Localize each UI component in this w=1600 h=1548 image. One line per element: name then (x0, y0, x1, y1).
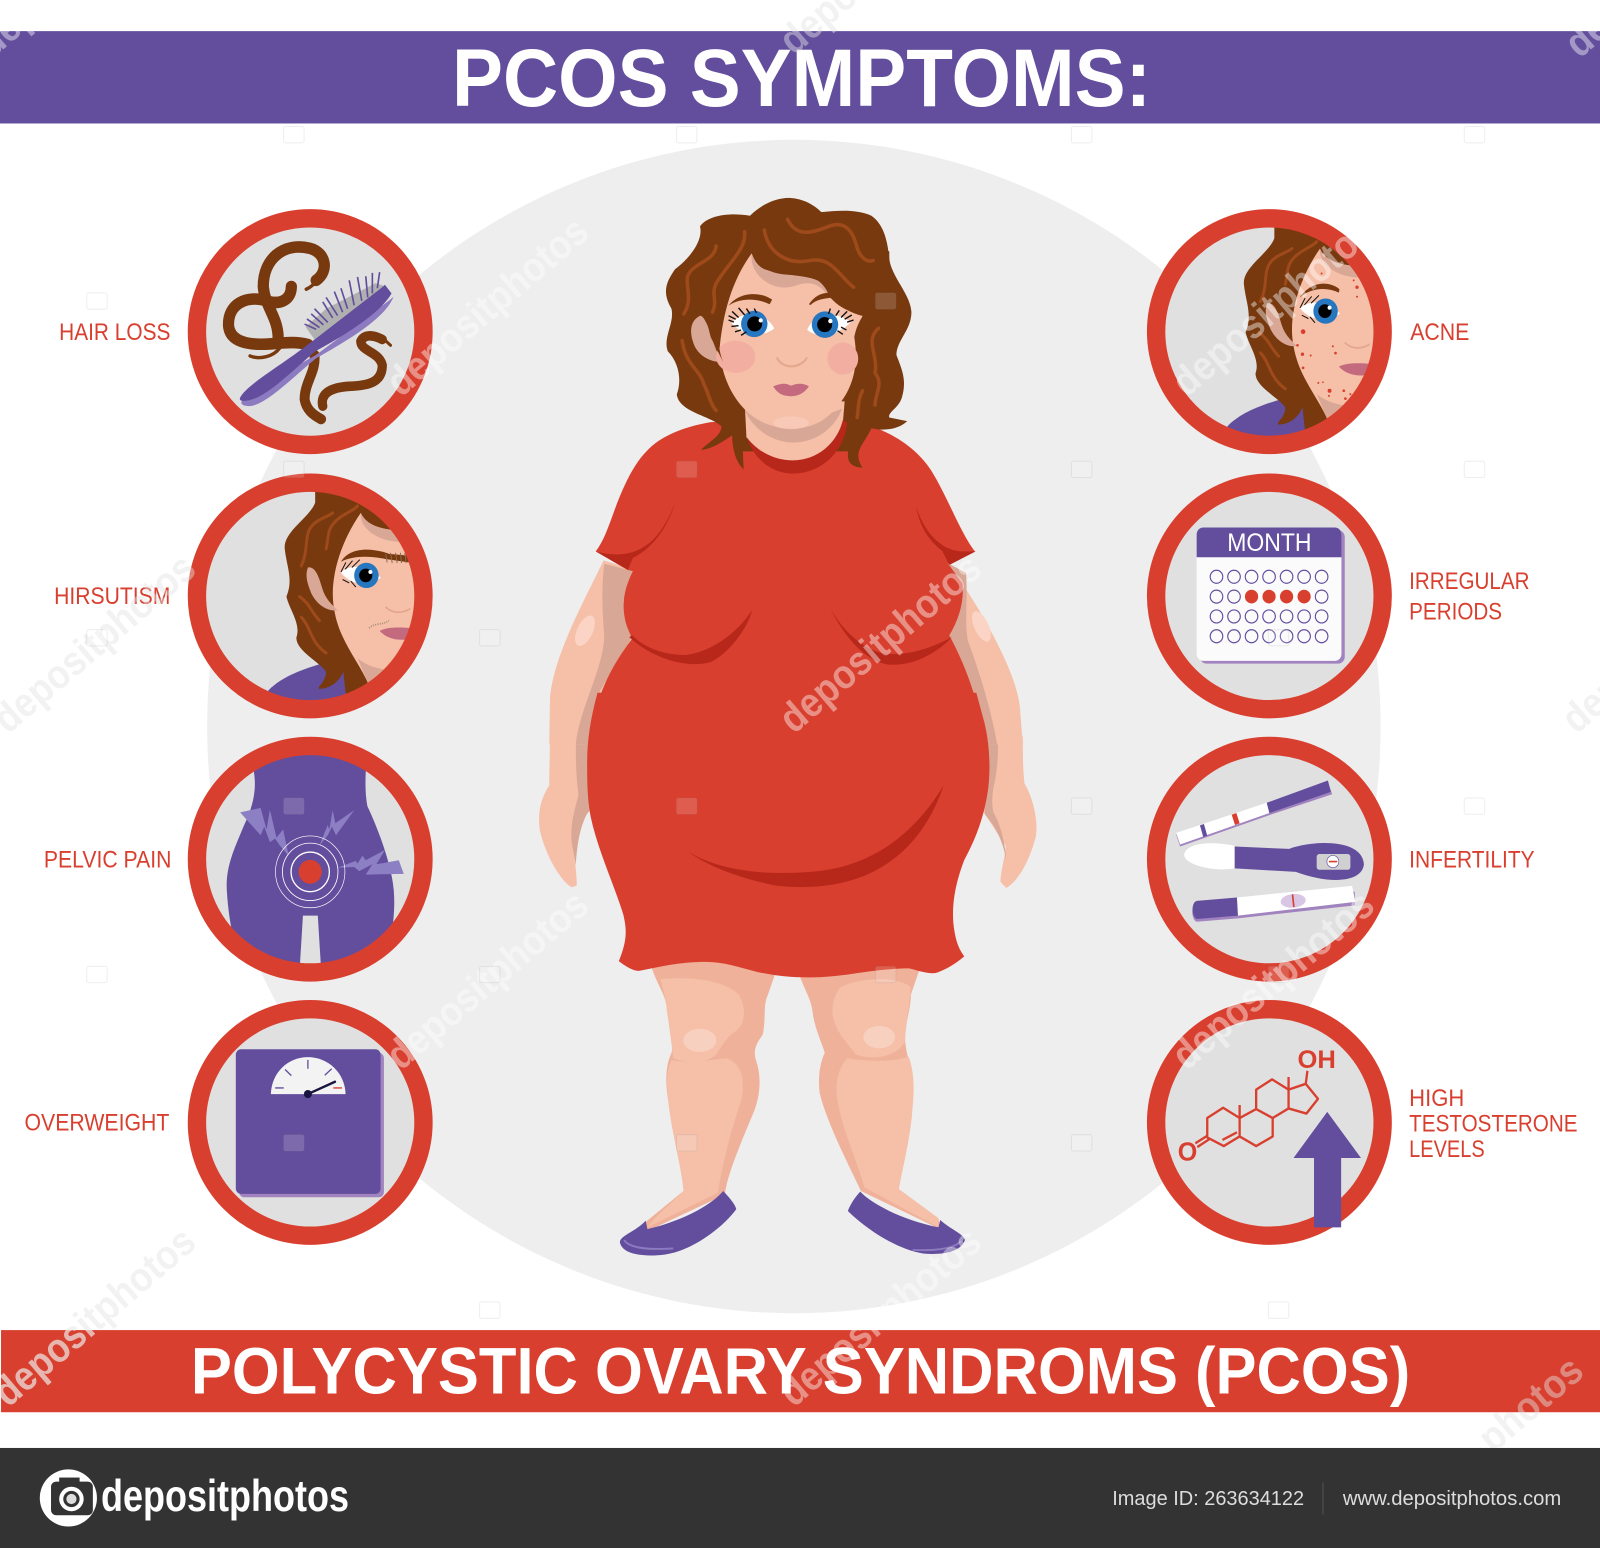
panel: irregular periods icon (1163, 490, 1376, 702)
bottom banner (1, 1330, 1600, 1412)
shoe: right (848, 1192, 965, 1254)
belly fold (689, 785, 944, 887)
eye: left (729, 308, 774, 337)
panel: hair loss icon (204, 226, 416, 438)
hair strands (229, 247, 391, 419)
navel (793, 731, 808, 738)
dial (271, 1057, 346, 1094)
ring: hirsutism (197, 483, 423, 709)
labels: left column: OVERWEIGHT (24, 1110, 169, 1137)
labels: right column: PERIODS (1409, 598, 1502, 625)
nose (777, 358, 807, 366)
ring: pelvic pain (197, 746, 423, 972)
thick brow and stubble (341, 550, 409, 628)
cheeks (716, 341, 858, 375)
panel: pelvic pain icon (206, 755, 414, 963)
watermarks: depositphotos (1163, 207, 1383, 405)
arrow: increase (1294, 1112, 1361, 1227)
ring: irregular periods (1156, 483, 1383, 709)
large grey circle (207, 140, 1381, 1313)
dress top (588, 416, 986, 751)
bust creases (629, 610, 752, 664)
watermarks: depositphotos (377, 881, 597, 1078)
ear (691, 316, 723, 362)
collar (747, 420, 847, 474)
pain centre (299, 860, 322, 884)
scale (239, 1053, 384, 1197)
pregnancy test: stick (1192, 886, 1355, 922)
oxygen labels: OH (1297, 1047, 1336, 1074)
labels: right column (1409, 319, 1578, 1163)
labels: right column: INFERTILITY (1409, 846, 1535, 873)
dress: skirt (587, 693, 989, 977)
panel: overweight icon (204, 1016, 416, 1229)
website: www.depositphotos.com (1342, 1488, 1561, 1510)
panel: acne icon (1166, 228, 1374, 436)
header band (0, 31, 1600, 124)
legs and feet (620, 951, 965, 1255)
icon: camera logo (40, 1469, 97, 1527)
labels: right column: HIGH (1409, 1085, 1464, 1112)
ring: infertility (1156, 746, 1383, 972)
watermarks: photos (1469, 1346, 1592, 1461)
banner text: POLYCYSTIC OVARY SYNDROMS (PCOS) (191, 1334, 1410, 1408)
period days (1245, 590, 1311, 603)
torso silhouette (226, 755, 394, 963)
ring: acne (1156, 218, 1383, 445)
neck (745, 401, 845, 464)
pain bolts (240, 808, 404, 875)
title: PCOS SYMPTOMS: (452, 33, 1151, 124)
ring: high testosterone (1156, 1009, 1383, 1236)
pregnancy test: strip (1176, 781, 1332, 847)
lower arms (539, 736, 1036, 888)
upper arms (549, 560, 1023, 744)
calendar (1200, 530, 1345, 664)
chin highlight (773, 416, 809, 429)
ring: overweight (197, 1009, 423, 1236)
hair: back (666, 198, 911, 469)
labels: left column: HIRSUTISM (54, 583, 170, 610)
oxygen labels: O (1178, 1138, 1197, 1166)
logo wordmark: depositphotos (101, 1470, 349, 1521)
footer bar (0, 1448, 1600, 1548)
watermarks: depositphotos (770, 1218, 990, 1415)
eyebrows (729, 293, 830, 306)
testosterone molecule (1195, 1071, 1318, 1147)
face (720, 253, 862, 429)
hair: bangs and waves (682, 216, 889, 418)
watermarks: depositphotos (770, 544, 990, 742)
labels: right column: LEVELS (1409, 1136, 1485, 1163)
camera watermark marks (87, 127, 1485, 1318)
labels: right column: ACNE (1410, 319, 1469, 346)
panel: high testosterone icon (1163, 1016, 1376, 1229)
eye: right (807, 309, 854, 338)
labels: right column: IRREGULAR (1409, 568, 1530, 595)
labels: left column (24, 319, 171, 1137)
labels: left column: PELVIC PAIN (44, 846, 171, 873)
dress: top, neck and head (588, 198, 986, 751)
needle (308, 1082, 335, 1094)
target rings (275, 836, 345, 908)
ring: hair loss (197, 218, 423, 445)
month label: MONTH (1227, 530, 1312, 557)
forehead shadow (751, 253, 828, 298)
sleeve creases (596, 503, 675, 570)
labels: left column: HAIR LOSS (59, 319, 170, 346)
day dots (1210, 570, 1328, 643)
chin shadow (745, 409, 842, 442)
panel: infertility icon (1163, 753, 1376, 965)
watermarks: depositphotos (377, 207, 597, 405)
watermarks: depositphotos (1163, 881, 1383, 1078)
oxygen labels (1178, 1047, 1336, 1166)
figure: woman in red dress (539, 198, 1036, 1255)
brush (240, 272, 394, 406)
lips (773, 384, 809, 396)
brow and spots (1296, 272, 1359, 400)
panel: hirsutism icon (206, 492, 414, 700)
shoe: left (620, 1191, 736, 1255)
pregnancy test: digital (1184, 843, 1364, 880)
image id: Image ID: 263634122 (1112, 1488, 1304, 1510)
